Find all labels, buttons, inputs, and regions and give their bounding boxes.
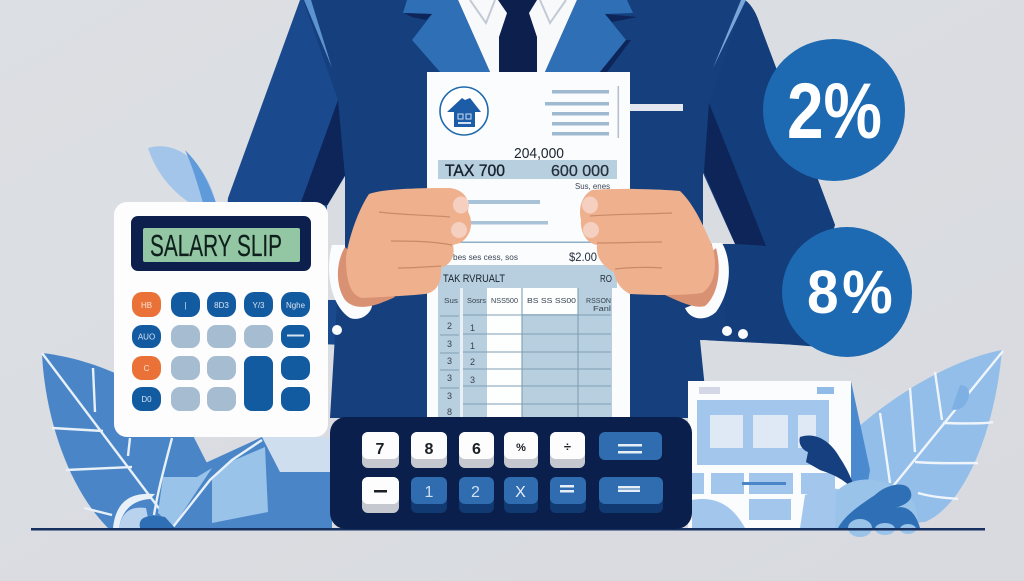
key labels: ÷ xyxy=(564,439,571,454)
salary slip paper xyxy=(427,72,683,418)
tax table xyxy=(438,265,617,418)
key labels: 1 xyxy=(425,484,434,501)
key labels: 2 xyxy=(471,484,480,501)
tax table: 1 xyxy=(470,341,475,351)
key labels: % xyxy=(516,442,526,454)
tax table: 3 xyxy=(447,373,452,383)
right leaf xyxy=(840,350,1003,528)
blue keys xyxy=(411,432,663,513)
percentage circle 2%: 2% xyxy=(787,66,882,155)
tax table: TAK RVRUALT xyxy=(443,273,505,285)
tax band: TAX 700 xyxy=(445,162,505,180)
tax table: 3 xyxy=(447,339,452,349)
desk calendar xyxy=(688,381,870,530)
key labels xyxy=(374,439,642,501)
tax table: Sus xyxy=(444,298,459,305)
tax band: 600 000 xyxy=(551,163,609,180)
key labels: 8 xyxy=(425,441,434,458)
calculator key labels: AUO xyxy=(138,332,155,342)
percentage circle 8% xyxy=(782,227,912,357)
calculator keys xyxy=(132,292,310,411)
tax table: 2 xyxy=(447,321,452,331)
amount: 204,000 xyxy=(514,145,564,162)
tax table: BS SS SS00 xyxy=(527,298,576,305)
body lines xyxy=(445,200,617,243)
calculator xyxy=(114,202,328,437)
calculator key labels: D0 xyxy=(141,395,152,404)
ground shapes left xyxy=(113,437,332,528)
calculator display xyxy=(131,216,311,271)
lapels xyxy=(403,0,637,72)
right cuff buttons xyxy=(722,326,748,339)
tax table: 3 xyxy=(447,391,452,401)
header lines xyxy=(545,86,619,138)
key labels: 7 xyxy=(376,441,385,458)
calculator display: SALARY SLIP xyxy=(150,228,282,263)
tax table: 3 xyxy=(470,375,475,385)
suit xyxy=(215,0,905,528)
tax table: 1 xyxy=(470,323,475,333)
calculator key labels: HB xyxy=(141,301,152,310)
key labels: X xyxy=(515,484,526,501)
percentage circle 8%: 8% xyxy=(807,259,893,326)
small note: Sus, enes xyxy=(575,182,610,191)
keypad xyxy=(330,417,692,529)
house logo xyxy=(440,87,488,135)
tax table: Sosrs xyxy=(467,298,487,305)
left cuff button xyxy=(332,325,342,335)
calculator key labels xyxy=(138,301,306,404)
potted plant xyxy=(799,436,920,537)
small leaf behind calculator xyxy=(148,146,216,203)
subtotal text: bes ses cess, sos xyxy=(453,252,518,262)
right hand xyxy=(580,189,729,318)
tax table: NSS500 xyxy=(491,298,518,305)
baseline xyxy=(31,528,985,530)
white keys xyxy=(362,432,585,513)
left leaf xyxy=(42,353,240,528)
tax table: 2 xyxy=(470,357,475,367)
shirt cuff xyxy=(685,243,729,318)
shirt and tie xyxy=(458,0,577,72)
tax table: Fanl xyxy=(593,306,612,313)
calculator key labels: Y/3 xyxy=(252,301,265,310)
key labels: 6 xyxy=(472,441,481,458)
tax table: RSSON xyxy=(586,298,611,305)
tax band xyxy=(438,160,617,180)
connector bar xyxy=(630,104,683,111)
tax table: 3 xyxy=(447,356,452,366)
percentage circle 2% xyxy=(763,39,905,181)
calculator key labels: | xyxy=(184,301,187,310)
left hand xyxy=(329,188,471,319)
calculator key labels: Nghe xyxy=(286,301,306,310)
calculator key labels: C xyxy=(144,364,150,373)
subtotal text xyxy=(453,250,597,264)
calculator key labels: 8D3 xyxy=(214,301,229,310)
tax table: RO xyxy=(600,273,612,285)
subtotal text: $2.00 xyxy=(569,250,597,264)
shirt cuff xyxy=(329,245,372,319)
tax table: 8 xyxy=(447,407,452,417)
